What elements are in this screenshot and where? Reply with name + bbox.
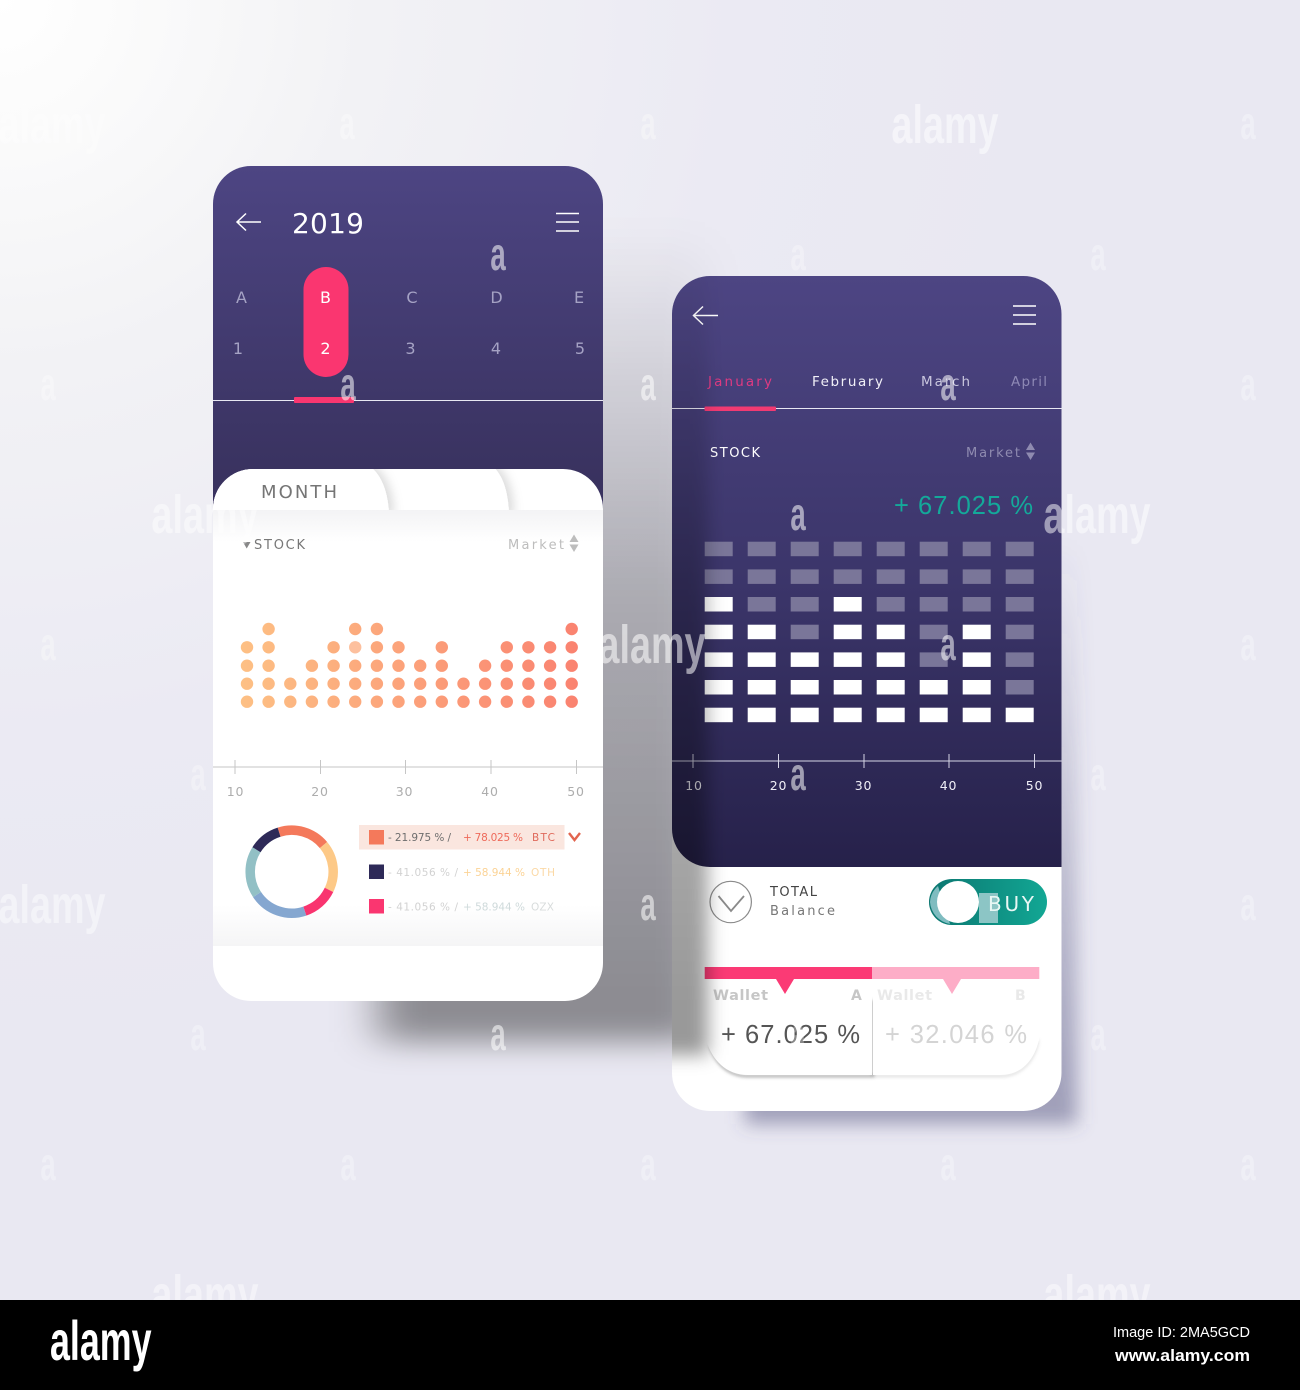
month tabs [213,469,517,510]
number selector [233,339,585,358]
watermarks on background: a [339,99,355,150]
wallet split bar [705,967,1039,994]
legend row: OTH [369,864,555,879]
legend row: BTC [359,825,564,850]
watermarks on dark areas: alamy [598,614,706,675]
legend row: OZX: OZX [531,902,554,914]
watermarks on background: a [640,1140,656,1191]
icon: expand chevron [569,833,580,840]
watermarks on background: a [1090,230,1106,281]
legend row: OZX [369,899,554,914]
watermarks on background: a [190,1010,206,1061]
watermarks on background: a [940,1140,956,1191]
letter selector: B [320,288,331,307]
icon: menu [556,214,579,231]
legend row: OTH: - 41.056 % / [388,867,458,879]
wallet card A: Wallet [713,988,768,1004]
watermarks on background: alamy [0,94,106,155]
website: www.alamy.com [1114,1346,1250,1365]
top fade band [213,510,603,542]
number selector: 4 [491,339,501,358]
month tabs: February [812,374,883,390]
x axis [213,760,603,799]
gain value: + 67.025 % [894,492,1033,520]
number selector: 3 [405,339,416,358]
watermarks on dark areas: a [940,360,956,411]
x axis: 50 [567,784,585,799]
watermarks on background: a [1240,880,1256,931]
letter selector: A [236,288,247,307]
watermarks on background: alamy [0,874,106,935]
x axis: 20 [311,784,329,799]
wallet card A: + 67.025 % [721,1021,860,1049]
footer logo: alamy [50,1309,152,1372]
x axis: 50 [1026,778,1043,793]
month tabs: March [921,374,970,390]
watermarks on background: alamy [891,94,999,155]
shadow: left phone cast [378,225,705,1042]
market sort label: Market [966,446,1020,461]
market sort label [508,534,578,553]
watermarks on background: alamy [151,484,259,545]
number selector: 1 [233,339,243,358]
total balance label: Balance [770,904,835,919]
legend row: OTH: + 58.944 % [463,867,525,879]
market sort label: Market [508,538,564,553]
donut chart [233,813,350,930]
total balance label [769,885,835,919]
icon: back arrow [237,214,261,230]
stock label: STOCK [254,538,305,553]
month tabs: January [707,374,772,390]
bar matrix: active cells [705,597,1034,722]
x axis: 40 [940,778,957,793]
watermarks on background: alamy [1043,1264,1151,1325]
month tabs [707,374,1047,390]
x axis: 30 [855,778,872,793]
watermarks on dark areas: a [640,880,656,931]
watermarks on background: a [1090,1010,1106,1061]
watermarks on dark areas: a [940,620,956,671]
letter selector: E [574,288,584,307]
buy toggle [929,879,1047,925]
tab underline [704,406,776,411]
icon: chevron circle [710,881,751,923]
watermarks on dark areas: a [790,490,806,541]
legend row: OZX: - 41.056 % / [388,902,458,914]
selected column pill [304,267,348,377]
letter selector: D [490,288,503,307]
watermarks on background: a [790,230,806,281]
panel: left phone [200,166,603,1001]
watermarks on dark areas: a [640,360,656,411]
wallet card A: A [851,988,862,1004]
x axis: 40 [481,784,499,799]
number selector: 5 [575,339,585,358]
wallet card B: Wallet [877,988,932,1004]
stock label: STOCK [710,446,760,461]
x axis: 10 [685,778,703,793]
number selector: 2 [320,339,331,358]
watermarks on background: a [1240,620,1256,671]
watermarks on background: a [40,620,56,671]
legend row: OTH: OTH [531,867,555,879]
bar matrix: inactive cells [705,542,1034,694]
x axis: 30 [396,784,413,799]
selector underline [294,397,354,403]
watermarks on background: alamy [1043,484,1151,545]
panel: right phone [672,276,1062,1111]
watermarks on background: a [40,360,56,411]
watermarks on background: a [1240,1140,1256,1191]
wallet card B [873,985,1039,1076]
year heading: 2019 [292,207,364,240]
x axis: 20 [770,778,787,793]
icon: menu [1013,306,1036,324]
watermarks on dark areas: a [790,1010,806,1061]
letter selector [236,288,584,307]
watermarks on background: a [1240,360,1256,411]
dot chart [241,623,578,708]
letter selector: C [406,288,418,307]
x axis: 10 [227,784,244,799]
watermarks on background: a [340,1140,356,1191]
bottom fade band [213,905,603,946]
white phone body [672,276,1062,1111]
watermarks on dark areas: a [340,360,356,411]
shadow overlay across right phone [672,306,720,1067]
white card [213,469,603,1001]
total balance label: TOTAL [769,885,818,900]
shadow: right phone cast [745,540,1077,1124]
watermarks on dark areas: a [790,750,806,801]
legend row: BTC: + 78.025 % [463,832,523,844]
month tabs: April [1011,374,1047,390]
dark upper panel [672,276,1062,867]
legend row: BTC: - 21.975 % / [388,832,451,844]
market sort label [966,442,1035,461]
watermarks on background: alamy [151,1264,259,1325]
tab divider line [672,408,1062,409]
wallet card B: + 32.046 % [885,1021,1027,1049]
watermarks on background: a [190,750,206,801]
legend row: OZX: + 58.944 % [463,902,525,914]
watermarks on background: a [1240,99,1256,150]
selector divider line [213,400,603,401]
watermarks on background: a [640,99,656,150]
image id: Image ID: 2MA5GCD [1113,1324,1250,1341]
wallet card B: B [1015,988,1026,1004]
buy toggle: BUY [988,892,1035,916]
wallet card A [706,985,873,1076]
x axis [672,754,1062,793]
footer bar [0,1300,1300,1390]
icon: back arrow [694,306,718,324]
legend row: BTC: BTC [532,832,555,844]
watermarks on dark areas: a [490,1010,506,1061]
watermarks on background: a [40,1140,56,1191]
watermarks on background: a [1090,750,1106,801]
month tab label: MONTH [261,482,337,503]
watermarks on dark areas [340,230,956,1061]
watermarks on dark areas: a [490,230,506,281]
phone body dark header [213,166,603,566]
